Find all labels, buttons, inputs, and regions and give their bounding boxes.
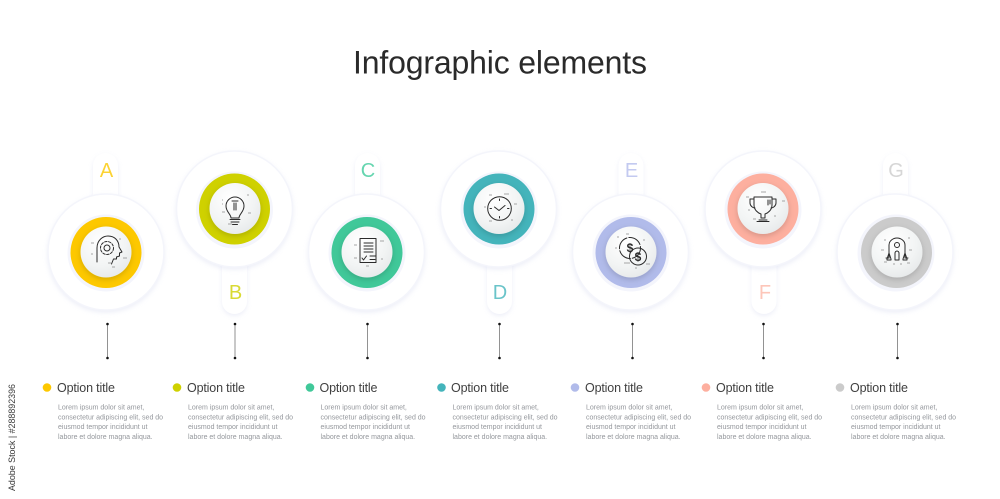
icon: rocket — [881, 238, 912, 264]
text block G: eiusmod tempor incididunt ut — [851, 424, 941, 431]
text block G: consectetur adipiscing elit, sed do — [851, 414, 956, 422]
text block E: labore et dolore magna aliqua. — [586, 434, 681, 441]
text block C: Lorem ipsum dolor sit amet, — [320, 404, 407, 412]
text block A: consectetur adipiscing elit, sed do — [58, 414, 163, 422]
tab B — [222, 250, 247, 314]
text block B: Option title — [187, 381, 245, 395]
step A — [48, 153, 164, 310]
connector C — [366, 323, 369, 359]
icon: coins — [615, 234, 650, 268]
text block B: labore et dolore magna aliqua. — [188, 434, 283, 441]
step D — [440, 151, 556, 314]
ring D — [464, 174, 534, 244]
step C — [308, 153, 424, 310]
text block G — [836, 381, 956, 441]
text block C: labore et dolore magna aliqua. — [320, 434, 415, 441]
halo A — [68, 214, 144, 292]
text block E: consectetur adipiscing elit, sed do — [586, 414, 691, 422]
step G — [837, 153, 953, 310]
connector G — [896, 323, 899, 359]
halo G — [858, 214, 934, 292]
letter A: A — [100, 160, 114, 182]
text block D — [437, 381, 558, 441]
icon: light bulb — [222, 195, 251, 224]
tab G — [883, 153, 908, 213]
text block C: eiusmod tempor incididunt ut — [320, 424, 410, 431]
text block F: eiusmod tempor incididunt ut — [717, 424, 807, 431]
halo E — [592, 214, 670, 292]
inner disc B — [210, 183, 260, 234]
ring F — [728, 174, 798, 244]
ring B — [199, 174, 270, 244]
outer disc C — [308, 194, 424, 310]
text block F — [702, 381, 822, 441]
step F — [705, 151, 821, 314]
connector A — [106, 323, 109, 359]
text block B: eiusmod tempor incididunt ut — [188, 424, 278, 431]
inner disc E — [606, 226, 656, 278]
text block E — [571, 381, 691, 441]
text block F: labore et dolore magna aliqua. — [717, 434, 812, 441]
text block B: Lorem ipsum dolor sit amet, — [188, 404, 274, 412]
title: Infographic elements — [353, 44, 647, 80]
text block A: Option title — [57, 381, 115, 395]
text block E: Lorem ipsum dolor sit amet, — [586, 404, 672, 412]
halo D — [460, 172, 538, 248]
tab E — [618, 153, 644, 213]
icon: coins: $ — [627, 241, 634, 255]
text block E: eiusmod tempor incididunt ut — [586, 424, 676, 431]
text block A: Lorem ipsum dolor sit amet, — [58, 404, 144, 412]
ring C — [332, 217, 402, 288]
icon: document checklist — [354, 238, 384, 266]
halo F — [724, 172, 802, 248]
text block A: eiusmod tempor incididunt ut — [58, 424, 148, 431]
inner disc G — [872, 226, 922, 278]
ring G — [861, 217, 932, 288]
outer disc A — [48, 194, 164, 310]
outer disc B — [176, 151, 292, 267]
text block E: Option title — [585, 381, 643, 395]
connector B — [234, 323, 236, 359]
text block C — [306, 381, 426, 441]
inner disc D — [474, 183, 524, 234]
text block G: Lorem ipsum dolor sit amet, — [851, 404, 937, 412]
text block C: Option title — [320, 381, 378, 395]
text block B — [173, 381, 293, 441]
text block D: consectetur adipiscing elit, sed do — [452, 414, 558, 422]
inner disc F — [738, 183, 788, 234]
text block F: Option title — [716, 381, 774, 395]
step B — [176, 151, 292, 314]
letter C: C — [361, 160, 375, 182]
connector E — [631, 323, 634, 359]
inner disc A — [80, 226, 132, 278]
outer disc G — [837, 194, 953, 310]
connector F — [762, 323, 765, 359]
tab A — [93, 153, 118, 213]
text block F: consectetur adipiscing elit, sed do — [717, 414, 822, 422]
text block A — [43, 381, 163, 441]
tab C — [355, 153, 380, 213]
outer disc E — [572, 194, 688, 310]
ring A — [70, 217, 142, 288]
letter D: D — [493, 282, 507, 304]
outer disc D — [440, 151, 556, 267]
text block A: labore et dolore magna aliqua. — [58, 434, 153, 441]
text block G: Option title — [850, 381, 908, 395]
icon: clock — [484, 194, 517, 221]
icon: coins: $ — [635, 250, 642, 264]
text block G: labore et dolore magna aliqua. — [851, 434, 946, 441]
letter B: B — [229, 282, 242, 304]
letter F: F — [759, 282, 771, 304]
text block D: Lorem ipsum dolor sit amet, — [452, 404, 539, 412]
text block D: Option title — [451, 381, 509, 395]
letter G: G — [888, 160, 904, 182]
text block D: labore et dolore magna aliqua. — [452, 434, 547, 441]
letter E: E — [625, 160, 638, 182]
outer disc F — [705, 151, 821, 267]
tab F — [752, 250, 776, 314]
text block C: consectetur adipiscing elit, sed do — [320, 414, 426, 422]
text block F: Lorem ipsum dolor sit amet, — [717, 404, 803, 412]
text block B: consectetur adipiscing elit, sed do — [188, 414, 293, 422]
halo C — [328, 214, 406, 292]
icon: head with gear — [91, 236, 127, 267]
connector D — [498, 323, 501, 359]
ring E — [596, 217, 666, 288]
inner disc C — [342, 226, 392, 278]
stock id: Adobe Stock | #288892396 — [7, 384, 18, 491]
text block D: eiusmod tempor incididunt ut — [452, 424, 542, 431]
halo B — [196, 172, 273, 248]
step E — [572, 153, 688, 310]
tab D — [487, 250, 512, 314]
icon: trophy — [746, 192, 785, 222]
